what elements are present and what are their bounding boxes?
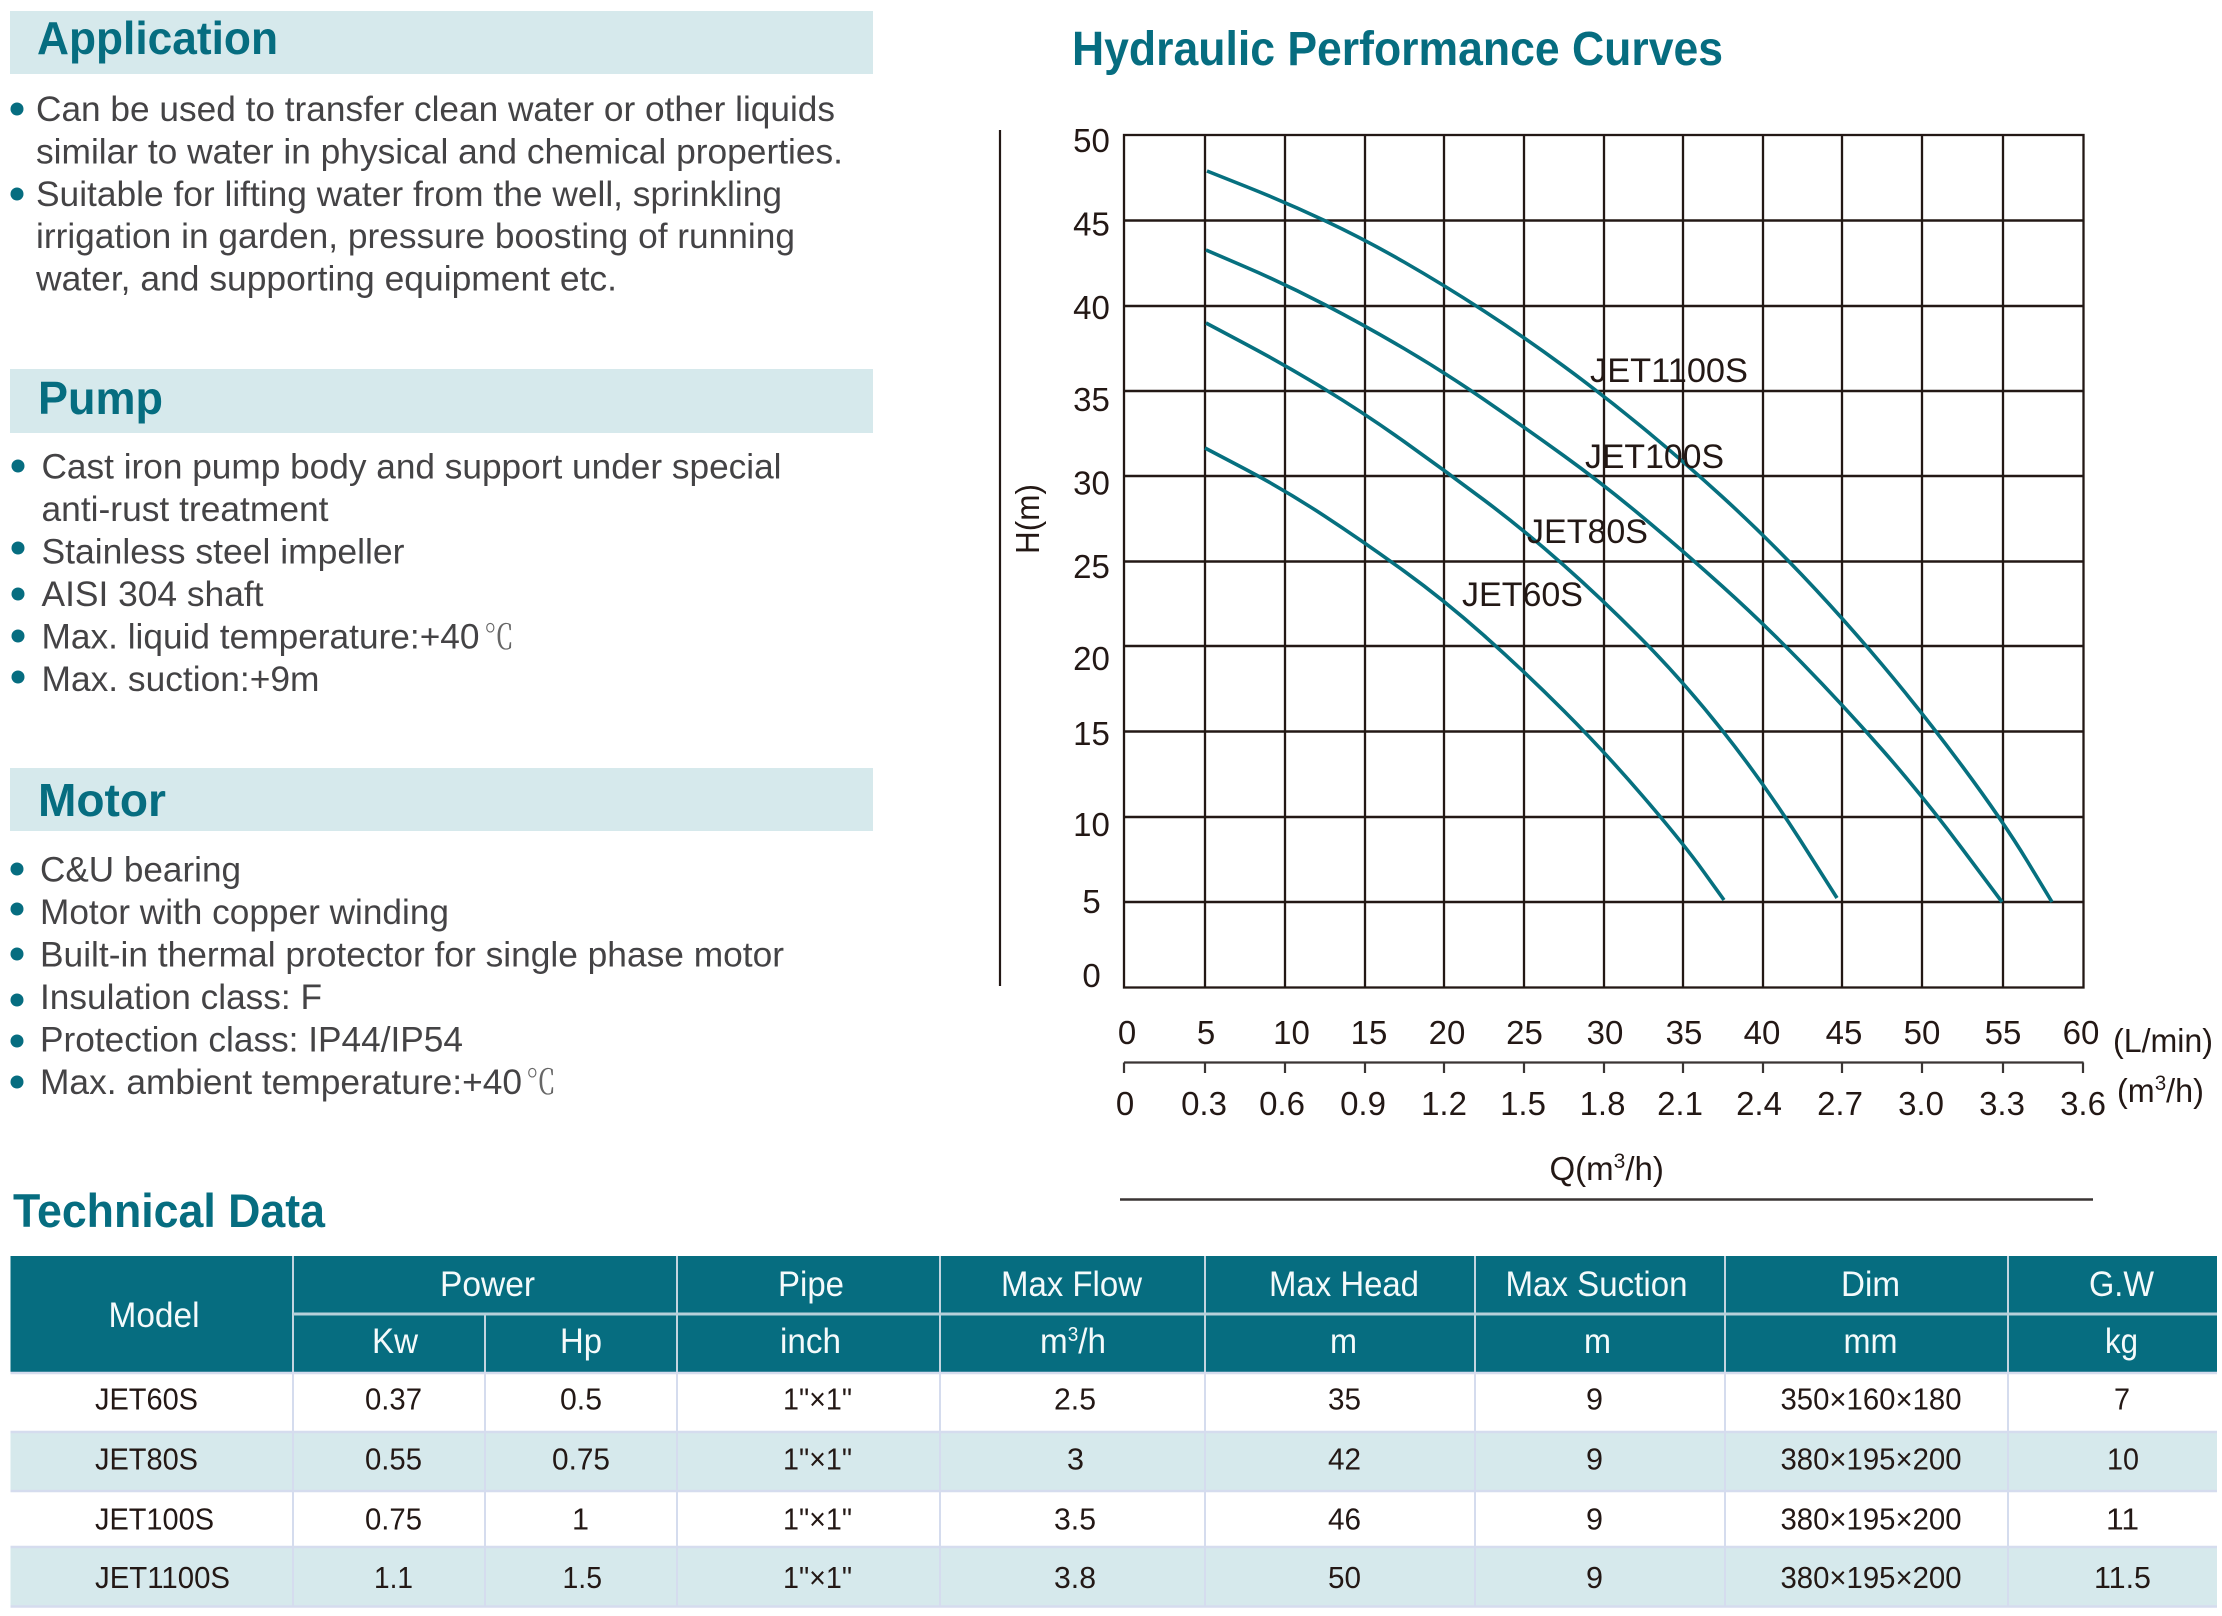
application bullet list [10, 89, 843, 298]
table header text: Max Head [1269, 1265, 1419, 1304]
table header text: Power [440, 1265, 535, 1304]
curve labels: JET80S [1527, 513, 1648, 551]
y axis labels: 25 [1073, 548, 1110, 585]
x axis labels: litres per minute: 45 [1826, 1014, 1862, 1051]
y axis labels: 30 [1073, 464, 1110, 502]
x axis labels: cubic metres per hour: 3.0 [1898, 1085, 1944, 1122]
bottom rule [1120, 1198, 2093, 1201]
heading: pump [10, 369, 873, 433]
table header text: Max Suction [1506, 1265, 1688, 1304]
curve labels: JET60S [1462, 576, 1583, 614]
row: JET100S [95, 1502, 2139, 1536]
pump bullet list: Max. liquid temperature:+40 [42, 616, 480, 656]
row: JET100S: 380×195×200 [1780, 1502, 1962, 1536]
x axis labels: cubic metres per hour: (m [2117, 1072, 2155, 1109]
table header text: 3 [1068, 1324, 1078, 1346]
x axis labels: cubic metres per hour: 0.9 [1340, 1085, 1386, 1122]
application bullet list: water, and supporting equipment etc. [35, 258, 617, 298]
pump bullet list: Stainless steel impeller [42, 532, 405, 572]
x axis labels: litres per minute: (L/min) [2113, 1022, 2213, 1059]
row: JET60S: 7 [2114, 1382, 2130, 1416]
motor bullet list: Insulation class: F [40, 977, 322, 1017]
row: JET100S: 1"×1" [783, 1502, 852, 1536]
x axis labels: litres per minute: 20 [1429, 1014, 1465, 1051]
motor bullet list: Protection class: IP44/IP54 [40, 1020, 463, 1060]
row: JET1100S: 9 [1586, 1560, 1603, 1595]
panel: hydraulic performance curves [1000, 23, 2213, 1200]
curve: JET80S [1206, 323, 1837, 898]
row: JET1100S: 1"×1" [783, 1560, 852, 1595]
heading: technical data: Technical Data [13, 1184, 326, 1237]
row: JET100S: 46 [1328, 1502, 1361, 1536]
table header text: m [1584, 1322, 1611, 1361]
row: JET80S: 3 [1067, 1442, 1084, 1476]
row: JET60S: 0.5 [560, 1382, 602, 1416]
row: JET100S: 11 [2106, 1502, 2139, 1536]
x axis labels: litres per minute [1118, 1014, 2213, 1059]
x axis labels: litres per minute: 55 [1985, 1014, 2021, 1051]
y axis labels: 15 [1073, 715, 1110, 752]
curve labels [1462, 352, 1748, 614]
x axis labels: cubic metres per hour: 0.3 [1181, 1085, 1227, 1122]
x axis labels: litres per minute: 5 [1197, 1014, 1215, 1051]
table header text: Model [108, 1296, 200, 1335]
table header text: mm [1844, 1322, 1898, 1361]
panel: technical data [10, 1184, 2217, 1606]
curve labels: JET1100S [1590, 352, 1748, 390]
y axis labels [1073, 122, 1110, 994]
panel: application [10, 11, 873, 298]
application bullet list: Suitable for lifting water from the well, sprinkling [36, 174, 782, 214]
x axis labels: litres per minute: 50 [1904, 1014, 1940, 1051]
row: JET60S [95, 1382, 2130, 1416]
x axis labels: litres per minute: 25 [1506, 1014, 1543, 1051]
heading: motor: Motor [38, 774, 166, 826]
row: JET60S: 9 [1586, 1382, 1603, 1416]
row: JET80S: 380×195×200 [1780, 1442, 1962, 1476]
heading: application: Application [37, 12, 278, 64]
x axis labels: litres per minute: 15 [1351, 1014, 1387, 1051]
x axis title: 3 [1614, 1150, 1625, 1173]
pump bullet list: Cast iron pump body and support under special [42, 446, 782, 486]
y axis labels: 5 [1082, 883, 1101, 920]
table header text: kg [2105, 1322, 2138, 1361]
pump bullet list: Max. suction:+9m [42, 659, 320, 699]
x axis labels: cubic metres per hour: 3.6 [2060, 1085, 2106, 1122]
motor bullet list: C&U bearing [40, 850, 241, 890]
x axis labels: cubic metres per hour: /h) [2166, 1072, 2204, 1109]
row: JET100S: 0.75 [365, 1502, 422, 1536]
data table [10, 1256, 2217, 1606]
row: JET80S: 42 [1328, 1442, 1361, 1476]
row: JET60S: 350×160×180 [1780, 1382, 1962, 1416]
x axis labels: cubic metres per hour: 3 [2155, 1072, 2166, 1095]
y axis labels: 40 [1073, 289, 1110, 326]
table lines [10, 1256, 2217, 1606]
x axis labels: cubic metres per hour: 1.2 [1421, 1085, 1467, 1122]
heading: application [10, 11, 873, 74]
table header text: inch [780, 1322, 841, 1361]
table header text: /h [1078, 1322, 1106, 1361]
x axis labels: cubic metres per hour [1116, 1072, 2204, 1122]
curve: JET1100S [1207, 171, 2052, 902]
row: JET80S [95, 1442, 2139, 1476]
heading: hydraulic performance curves: Hydraulic Performance Curves [1072, 23, 1723, 76]
table header text: m [1330, 1322, 1357, 1361]
row: JET100S: 9 [1586, 1502, 1603, 1536]
heading: motor [10, 768, 873, 831]
application bullet list: irrigation in garden, pressure boosting of running [36, 216, 795, 256]
pump curves [1205, 171, 2052, 902]
panel: pump [10, 369, 873, 699]
motor bullet list: Max. ambient temperature:+40 [40, 1062, 522, 1102]
row: JET1100S: 3.8 [1054, 1560, 1096, 1595]
table header background [10, 1256, 2217, 1373]
x axis title: Q(m [1550, 1150, 1614, 1187]
row: JET1100S [95, 1560, 2151, 1595]
y axis labels: 50 [1073, 122, 1110, 159]
motor bullet list: Built-in thermal protector for single phase motor [40, 934, 784, 974]
y axis labels: 45 [1073, 206, 1110, 242]
row: JET100S: 3.5 [1054, 1502, 1096, 1536]
curve: JET60S [1205, 448, 1724, 900]
y axis title: H(m) [1009, 484, 1046, 554]
x axis labels: cubic metres per hour: 2.7 [1817, 1085, 1863, 1122]
row: JET60S: 0.37 [365, 1382, 422, 1416]
application bullet list: Can be used to transfer clean water or other liquids [36, 89, 835, 129]
pump bullet list: anti-rust treatment [42, 489, 329, 529]
row: JET1100S: 1.5 [562, 1560, 602, 1595]
x axis labels: cubic metres per hour: 2.4 [1736, 1085, 1782, 1122]
row: JET1100S: JET1100S [95, 1560, 230, 1595]
table header text: Hp [560, 1322, 602, 1361]
y axis labels: 10 [1073, 806, 1110, 843]
chart grid [1124, 135, 2084, 988]
x axis labels: litres per minute: 40 [1744, 1014, 1780, 1051]
table striped rows [10, 1432, 2217, 1606]
row: JET1100S: 380×195×200 [1780, 1560, 1962, 1595]
row: JET60S: 1"×1" [783, 1382, 852, 1416]
row: JET1100S: 50 [1328, 1560, 1361, 1595]
table header text: Pipe [778, 1265, 844, 1304]
row: JET100S: 1 [572, 1502, 589, 1536]
pump bullet list: ℃ [484, 610, 514, 659]
row: JET1100S: 1.1 [374, 1560, 413, 1595]
table header text: G.W [2089, 1265, 2154, 1304]
pump bullet list: AISI 304 shaft [42, 574, 264, 614]
motor bullet list: ℃ [526, 1055, 556, 1104]
row: JET80S: 0.55 [365, 1442, 422, 1476]
panel: motor [10, 768, 873, 1104]
motor bullet list: Motor with copper winding [40, 892, 449, 932]
row: JET60S: 2.5 [1054, 1382, 1096, 1416]
x axis labels: cubic metres per hour: 2.1 [1657, 1085, 1703, 1122]
x axis labels: cubic metres per hour: 1.8 [1580, 1085, 1625, 1122]
y axis labels: 35 [1073, 381, 1110, 418]
row: JET60S: 35 [1328, 1382, 1361, 1416]
row: JET80S: 10 [2107, 1442, 2139, 1476]
row: JET100S: JET100S [95, 1502, 214, 1536]
table header text [108, 1265, 2154, 1361]
x axis labels: litres per minute: 60 [2063, 1014, 2099, 1051]
curve labels: JET100S [1585, 438, 1724, 476]
x axis labels: cubic metres per hour: 0.6 [1259, 1085, 1305, 1122]
pump bullet list [12, 446, 782, 699]
y axis labels: 20 [1073, 640, 1110, 677]
table header text: m [1040, 1322, 1068, 1361]
row: JET60S: JET60S [95, 1382, 198, 1416]
y axis labels: 0 [1082, 957, 1101, 994]
row: JET80S: 1"×1" [783, 1442, 852, 1476]
table header text: Kw [372, 1322, 419, 1361]
x axis labels: cubic metres per hour: 1.5 [1500, 1085, 1546, 1122]
motor bullet list [10, 850, 784, 1104]
heading: pump: Pump [38, 372, 163, 424]
x axis labels: litres per minute: 0 [1118, 1014, 1136, 1051]
x axis scale [1124, 1062, 2084, 1073]
row: JET80S: 0.75 [552, 1442, 610, 1476]
x axis labels: litres per minute: 35 [1666, 1014, 1702, 1051]
row: JET80S: 9 [1586, 1442, 1603, 1476]
x axis labels: litres per minute: 30 [1587, 1014, 1623, 1051]
curve: JET100S [1206, 250, 2002, 902]
table header text: Dim [1841, 1265, 1900, 1304]
application bullet list: similar to water in physical and chemical properties. [36, 132, 843, 172]
row: JET80S: JET80S [95, 1442, 198, 1476]
row: JET1100S: 11.5 [2094, 1560, 2151, 1595]
x axis labels: cubic metres per hour: 3.3 [1979, 1085, 2025, 1122]
left rule [999, 130, 1001, 986]
table header text: Max Flow [1001, 1265, 1143, 1304]
x axis labels: cubic metres per hour: 0 [1116, 1085, 1134, 1122]
x axis title: /h) [1625, 1150, 1664, 1187]
x axis labels: litres per minute: 10 [1273, 1014, 1310, 1051]
